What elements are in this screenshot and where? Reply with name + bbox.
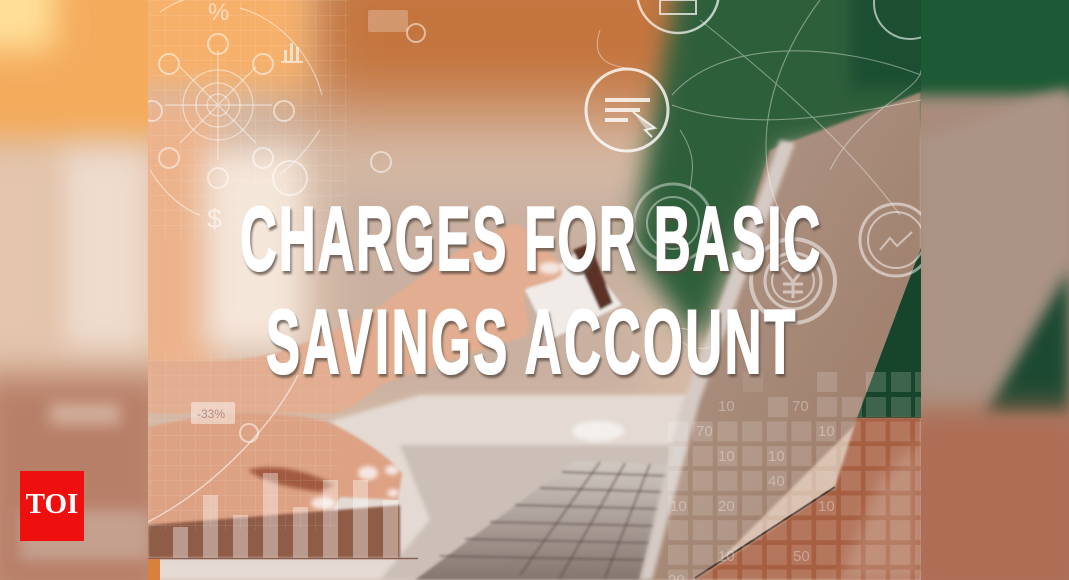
mosaic numbers: 10 bbox=[818, 498, 835, 515]
icon: circle behind title bbox=[634, 184, 712, 262]
title bbox=[242, 206, 822, 380]
tag: percent label: -33% bbox=[197, 407, 225, 421]
mosaic numbers: 20 bbox=[718, 498, 735, 515]
tag: percent label bbox=[191, 402, 235, 424]
logo: TOI bbox=[20, 471, 84, 541]
hand upper with card bbox=[148, 223, 622, 413]
grid overlay bbox=[148, 0, 348, 240]
tag: top label bbox=[368, 10, 408, 32]
mosaic numbers: 40 bbox=[768, 473, 785, 490]
mosaic numbers: 70 bbox=[792, 398, 809, 415]
panel: blurred left side bbox=[0, 0, 148, 580]
blurred photo background bbox=[120, 0, 720, 400]
mosaic numbers: 10 bbox=[670, 498, 687, 515]
chart baseline bbox=[148, 558, 418, 560]
under-hand shadow bbox=[148, 505, 400, 558]
mosaic numbers: 10 bbox=[718, 548, 735, 565]
wood table bbox=[695, 418, 921, 580]
mosaic numbers: 50 bbox=[793, 548, 810, 565]
growth curve bbox=[148, 375, 298, 522]
finger gap bbox=[248, 467, 335, 492]
bar chart overlay bbox=[173, 473, 398, 558]
percent and dollar symbols: $ bbox=[207, 204, 222, 234]
percent and dollar symbols bbox=[207, 0, 229, 234]
mosaic numbers: 10 bbox=[718, 398, 735, 415]
icon: mini bar chart bbox=[281, 43, 303, 63]
icon: top right circle bbox=[873, 0, 921, 40]
laptop base bbox=[380, 445, 690, 580]
laptop lid edge bbox=[640, 140, 795, 580]
desk bbox=[148, 395, 720, 580]
icon: chart ring bbox=[860, 204, 932, 276]
panel: blurred right side bbox=[900, 0, 1069, 580]
hand lower bbox=[148, 413, 402, 527]
mouse bbox=[572, 421, 624, 441]
mosaic numbers bbox=[668, 398, 835, 580]
laptop lid bbox=[640, 92, 921, 580]
icon: document pointer circle bbox=[586, 69, 668, 151]
keyboard keys bbox=[440, 462, 668, 578]
keyboard bbox=[415, 461, 672, 580]
mosaic numbers: 10 bbox=[768, 448, 785, 465]
number tile mosaic bbox=[668, 372, 921, 580]
icon: small nodes bbox=[142, 24, 425, 442]
mosaic numbers: 10 bbox=[718, 448, 735, 465]
dark wedge bbox=[857, 248, 921, 418]
mosaic numbers: 70 bbox=[696, 423, 713, 440]
icon: radar wheel bbox=[150, 0, 322, 215]
icon: top document circle bbox=[637, 0, 719, 33]
title: CHARGES FOR BASIC bbox=[240, 187, 820, 290]
network lines bbox=[597, 0, 921, 348]
green blurred background bbox=[630, 0, 950, 345]
icon: currency ring bbox=[751, 239, 835, 323]
table edge bbox=[695, 487, 835, 578]
logo: TOI: TOI bbox=[26, 488, 78, 520]
title: SAVINGS ACCOUNT bbox=[266, 290, 795, 393]
mosaic numbers: 10 bbox=[818, 423, 835, 440]
fingernails bbox=[311, 262, 561, 509]
panel: central photo bbox=[120, 0, 950, 580]
